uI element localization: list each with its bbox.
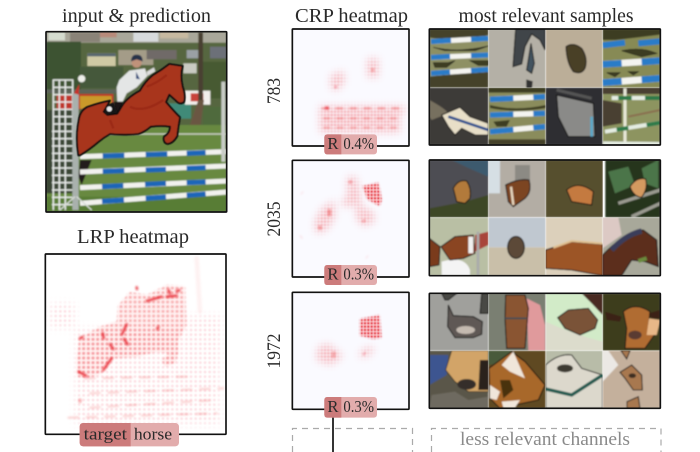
channel label 2035: 2035	[264, 202, 285, 236]
sample: horse head	[488, 160, 546, 217]
panel: samples for channel 1972	[429, 293, 660, 408]
heading: input & prediction: input & prediction	[62, 5, 211, 27]
sample: muzzle	[429, 293, 488, 351]
label: R 0.4%	[324, 134, 377, 154]
dashed placeholder: less relevant heatmap	[292, 428, 412, 452]
lattice gate	[52, 79, 73, 210]
sample: fence poles	[429, 29, 488, 88]
sample: tan cow	[603, 351, 660, 408]
sample: grey metal	[488, 29, 546, 88]
sample: brown and white cow	[488, 351, 546, 408]
heading: CRP heatmap: CRP heatmap	[295, 5, 408, 27]
sample: calf on grass	[546, 293, 603, 351]
heading: LRP heatmap: LRP heatmap	[77, 226, 189, 248]
horse segmentation	[77, 64, 185, 155]
sample: horse body	[429, 217, 488, 276]
sample: white cow with halter	[546, 351, 603, 408]
sample: horse in leaves	[605, 160, 660, 217]
label: R 0.4%: R	[327, 134, 339, 153]
sample: green poles	[603, 88, 660, 145]
sample: small horse on hill	[429, 160, 488, 217]
panel: CRP heatmap 2035	[292, 160, 409, 285]
panel: CRP heatmap 1972	[292, 292, 409, 409]
label: target horse: target	[84, 425, 127, 444]
panel: CRP heatmap 783	[292, 29, 409, 154]
label: target horse	[80, 423, 179, 446]
rider	[114, 55, 155, 113]
label: target horse: horse	[134, 425, 172, 444]
sample: dark oval	[546, 29, 603, 88]
sample: horse face	[488, 293, 546, 351]
photo background	[46, 32, 227, 212]
label: R 0.3%: 0.3%	[343, 397, 374, 416]
sample: horse on path	[488, 217, 546, 276]
sample: horse in forest	[546, 160, 605, 217]
label: R 0.3%	[324, 265, 377, 285]
sample: horse with bridle	[603, 217, 660, 276]
text: less relevant channels: less relevant channels	[460, 429, 630, 450]
sample: blue poles	[488, 88, 546, 145]
panel: samples for channel 2035	[429, 160, 660, 276]
sample: cow lying	[429, 351, 488, 408]
sample: horse neck	[546, 217, 603, 276]
panel: samples for channel 783	[429, 29, 660, 145]
channel label 783: 783	[264, 78, 285, 104]
panel: input image with horse prediction	[46, 32, 227, 212]
connector line	[332, 417, 334, 452]
hot spots	[68, 258, 223, 418]
channel label 1972: 1972	[264, 334, 285, 368]
sample: grey bag	[546, 88, 603, 145]
sample: striped object	[429, 88, 488, 145]
label: R 0.3%: R	[327, 397, 339, 416]
sample: brown cow	[603, 293, 660, 351]
panel: LRP heatmap	[45, 254, 226, 446]
label: R 0.3%: 0.3%	[343, 265, 374, 284]
label: R 0.4%: 0.4%	[343, 134, 374, 153]
label: R 0.3%	[324, 397, 377, 418]
fence poles	[80, 152, 227, 203]
sample: blue poles	[603, 29, 660, 88]
label: R 0.3%: R	[327, 265, 339, 284]
dashed placeholder: less relevant samples	[432, 428, 661, 452]
heading: most relevant samples: most relevant samples	[458, 5, 634, 27]
